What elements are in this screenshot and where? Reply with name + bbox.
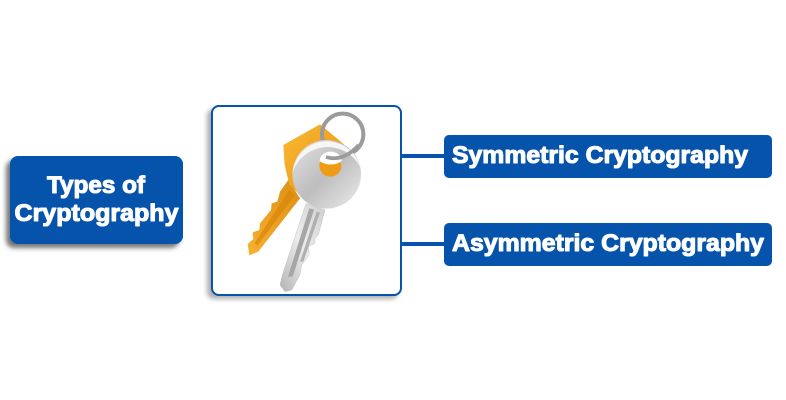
heading: Cryptography: Cryptography xyxy=(14,200,179,227)
label: Asymmetric Cryptography: Asymmetric Cryptography xyxy=(452,230,765,257)
icon: keys xyxy=(248,114,363,292)
connector lines xyxy=(400,154,446,246)
panel: keys image xyxy=(207,106,401,299)
key hole xyxy=(319,155,341,177)
heading: Types of: Types of xyxy=(47,172,146,199)
ring front xyxy=(326,145,359,158)
icon: silver key xyxy=(280,140,361,292)
label: Symmetric Cryptography: Symmetric Cryptography xyxy=(452,142,749,169)
panel: Types of Cryptography xyxy=(6,156,183,248)
panel: Asymmetric Cryptography xyxy=(444,223,772,266)
icon: key ring xyxy=(322,114,363,155)
panel: Symmetric Cryptography xyxy=(444,135,772,178)
icon: orange key xyxy=(248,124,344,255)
